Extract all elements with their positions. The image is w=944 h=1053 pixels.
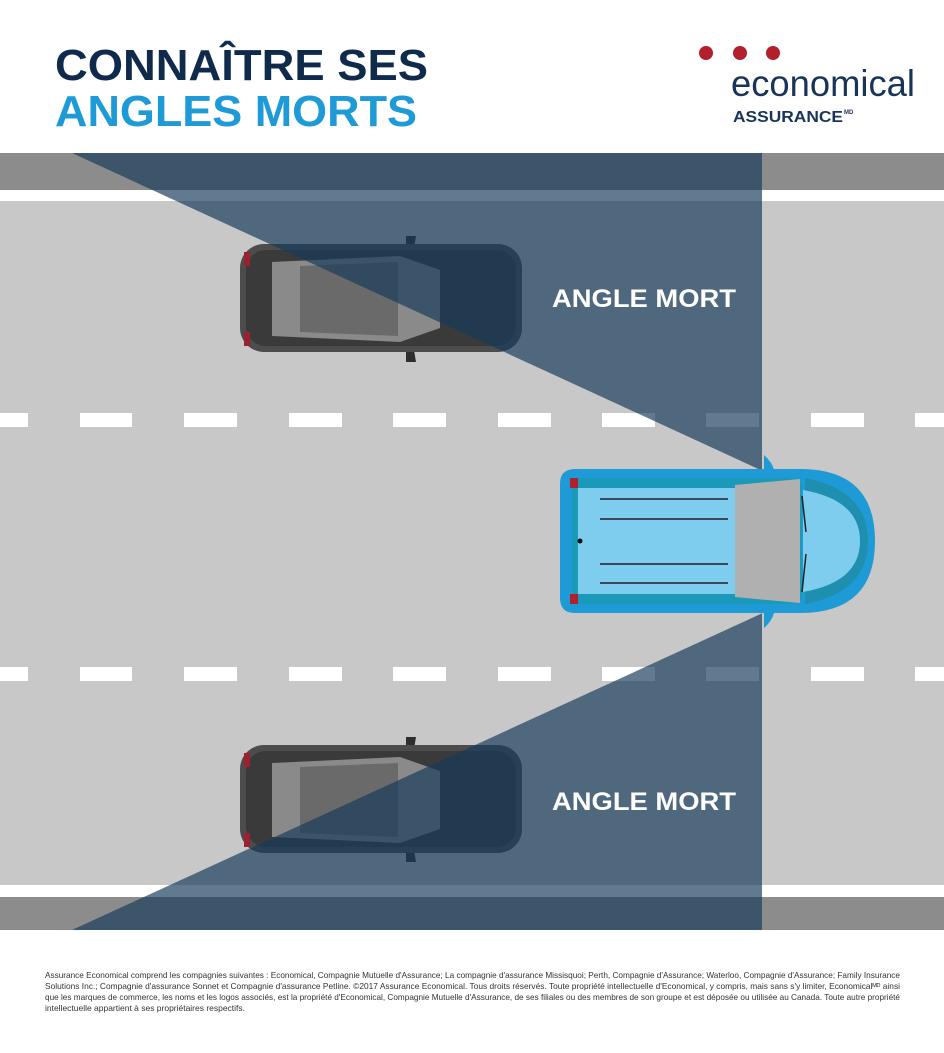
footer disclaimer: Assurance Economical comprend les compagnies suivantes : Economical, Compagnie Mutuelle d'Assurance; La compagnie d'assurance Missisquoi; Perth, Compagnie d'Assurance; Waterloo, Compagnie d'Assurance; Family Insurance bbox=[45, 970, 900, 980]
label: angle mort bottom: ANGLE MORT bbox=[552, 788, 736, 816]
logo bbox=[699, 46, 915, 126]
label: angle mort top: ANGLE MORT bbox=[552, 285, 736, 313]
car: top dark bbox=[240, 236, 522, 362]
title: CONNAÎTRE SES bbox=[55, 40, 428, 90]
footer disclaimer: Solutions Inc.; Compagnie d'assurance Sonnet et Compagnie d'assurance Petline. ©2017 Assurance Economical. Tous droits réservés. Toute propriété intellectuelle d'Economical, y compris, mais sans s'y limiter, Economicalᴹᴰ ainsi bbox=[45, 981, 900, 991]
footer disclaimer bbox=[45, 970, 900, 1013]
title bbox=[55, 40, 428, 136]
car: blue bbox=[560, 455, 875, 628]
logo: economical bbox=[731, 63, 915, 104]
title: ANGLES MORTS bbox=[55, 87, 417, 136]
blind spot zones bbox=[72, 153, 765, 930]
car: bottom dark bbox=[240, 737, 522, 862]
logo: ASSURANCE bbox=[733, 109, 843, 126]
logo: MD bbox=[844, 110, 854, 116]
road bbox=[0, 153, 944, 930]
footer disclaimer: que les marques de commerce, les noms et les logos associés, est la propriété d'Economical, Compagnie Mutuelle d'Assurance, de ses filiales ou des membres de son groupe et est déposée ou utilisée au Canada. Toute autre propriété bbox=[45, 992, 900, 1002]
footer disclaimer: intellectuelle appartient à ses propriétaires respectifs. bbox=[45, 1003, 245, 1013]
